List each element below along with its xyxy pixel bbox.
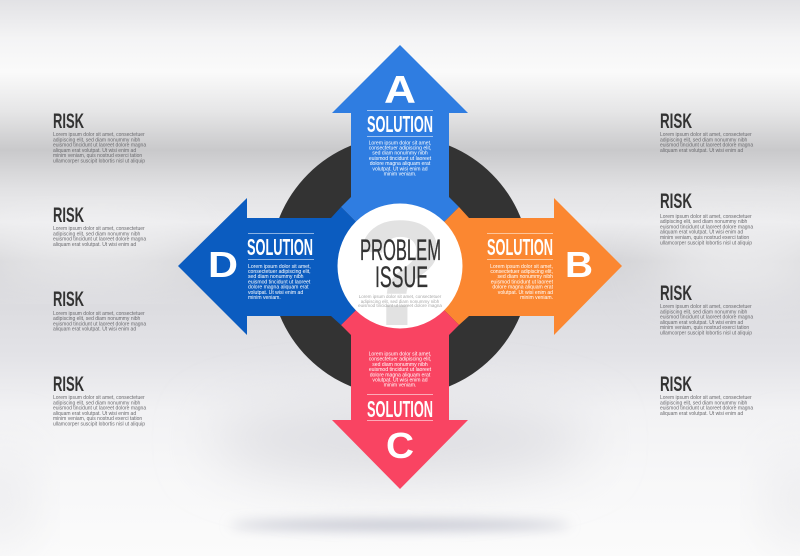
risk left 1: ullamcorper suscipit lobortis nisl ut aliquip: [53, 158, 145, 164]
dark circle: [270, 136, 530, 396]
text block B: euismod tincidunt ut laoreet: [491, 279, 554, 285]
text block A: sed diam nonummy nibh: [372, 151, 428, 157]
risk left 1: minim veniam, quis nostrud exerci tation: [53, 153, 142, 159]
risk right 4: Lorem ipsum dolor sit amet, consectetuer: [660, 395, 752, 401]
solution heading C: [367, 394, 433, 422]
center title: [360, 234, 441, 294]
risk right 3: adipiscing elit, sed diam nonummy nibh: [660, 309, 747, 315]
text block D: Lorem ipsum dolor sit amet,: [248, 264, 311, 270]
risk right 1: RISK: [660, 109, 692, 133]
solution heading B: SOLUTION: [487, 234, 553, 260]
risk left 4: aliquam erat volutpat. Ut wisi enim ad: [53, 411, 136, 417]
risk left 2: adipiscing elit, sed diam nonummy nibh: [53, 231, 140, 237]
text block B: Lorem ipsum dolor sit amet,: [490, 264, 553, 270]
center circle: [338, 189, 462, 357]
risk right 3: euismod tincidunt ut laoreet dolore magna: [660, 315, 753, 321]
risk left 4: adipiscing elit, sed diam nonummy nibh: [53, 400, 140, 406]
arrow D: dark blue: [178, 198, 400, 335]
text block B: volutpat. Ut wisi enim ad: [498, 290, 553, 296]
letter A: A: [384, 69, 416, 112]
text block B: [490, 264, 554, 301]
risk right 2: euismod tincidunt ut laoreet dolore magna: [660, 224, 753, 230]
solution heading D: SOLUTION: [247, 234, 313, 260]
risk right 3: minim veniam, quis nostrud exerci tation: [660, 325, 749, 331]
text block B: minim veniam.: [520, 295, 553, 301]
risk left 3: [53, 287, 146, 333]
text block D: sed diam nonummy nibh: [248, 274, 304, 280]
arrow C: red: [332, 266, 468, 489]
risk right 1: euismod tincidunt ut laoreet dolore magna: [660, 143, 753, 149]
risk right 4: aliquam erat volutpat. Ut wisi enim ad: [660, 411, 743, 417]
risk left 1: adipiscing elit, sed diam nonummy nibh: [53, 137, 140, 143]
text block C: minim veniam.: [384, 383, 416, 389]
text block B: sed diam nonummy nibh: [498, 274, 553, 280]
risk right 2: ullamcorper suscipit lobortis nisl ut aliquip: [660, 240, 752, 246]
risk left 2: aliquam erat volutpat. Ut wisi enim ad: [53, 242, 136, 248]
text block C: [369, 352, 432, 389]
risk right 3: ullamcorper suscipit lobortis nisl ut aliquip: [660, 330, 752, 336]
center title: ISSUE: [375, 261, 428, 294]
text block A: [369, 140, 432, 178]
risk left 2: Lorem ipsum dolor sit amet, consectetuer: [53, 226, 145, 232]
risk left 1: [53, 109, 146, 164]
risk left 4: minim veniam, quis nostrud exerci tation: [53, 416, 142, 422]
risk left 2: euismod tincidunt ut laoreet dolore magna: [53, 237, 146, 243]
risk left 3: euismod tincidunt ut laoreet dolore magna: [53, 321, 146, 327]
text block C: volutpat. Ut wisi enim ad: [372, 378, 428, 384]
arrow A: blue: [332, 45, 468, 266]
text block A: euismod tincidunt ut laoreet: [369, 156, 432, 162]
center caption: [358, 294, 442, 308]
risk right 1: Lorem ipsum dolor sit amet, consectetuer: [660, 132, 752, 138]
text block C: dolore magna aliquam erat: [370, 372, 431, 378]
text block D: consectetuer adipiscing elit,: [248, 269, 311, 275]
risk right 3: aliquam erat volutpat. Ut wisi enim ad: [660, 320, 743, 326]
arrow B: orange: [400, 198, 622, 335]
text block C: sed diam nonummy nibh: [372, 362, 428, 368]
text block A: consectetuer adipiscing elit,: [369, 146, 431, 152]
text block A: dolore magna aliquam erat: [370, 161, 431, 167]
risk right 4: euismod tincidunt ut laoreet dolore magna: [660, 406, 753, 412]
risk left 4: [53, 372, 146, 428]
risk left 4: RISK: [53, 372, 84, 396]
risk left 1: aliquam erat volutpat. Ut wisi enim ad: [53, 148, 136, 154]
risk right 3: [660, 281, 753, 336]
risk right 1: aliquam erat volutpat. Ut wisi enim ad: [660, 148, 743, 154]
risk left 3: Lorem ipsum dolor sit amet, consectetuer: [53, 311, 145, 317]
risk right 1: [660, 109, 753, 154]
risk left 3: aliquam erat volutpat. Ut wisi enim ad: [53, 327, 136, 333]
center title: PROBLEM: [360, 234, 441, 267]
text block D: dolore magna aliquam erat: [248, 285, 309, 291]
risk right 2: aliquam erat volutpat. Ut wisi enim ad: [660, 230, 743, 236]
letter D: D: [208, 244, 238, 285]
risk left 4: ullamcorper suscipit lobortis nisl ut aliquip: [53, 422, 145, 428]
risk left 1: RISK: [53, 109, 84, 133]
risk left 3: adipiscing elit, sed diam nonummy nibh: [53, 316, 140, 322]
text block D: euismod tincidunt ut laoreet: [248, 279, 311, 285]
solution heading A: [367, 110, 433, 137]
center caption: Lorem ipsum dolor sit amet, consectetuer: [359, 294, 442, 299]
risk right 4: [660, 372, 753, 417]
text block D: volutpat. Ut wisi enim ad: [248, 290, 303, 296]
risk right 3: Lorem ipsum dolor sit amet, consectetuer: [660, 304, 752, 310]
risk left 1: euismod tincidunt ut laoreet dolore magna: [53, 143, 146, 149]
text block C: Lorem ipsum dolor sit amet,: [369, 352, 431, 358]
text block D: minim veniam.: [248, 295, 281, 301]
text block D: [248, 264, 311, 301]
text block B: consectetuer adipiscing elit,: [490, 269, 553, 275]
solution heading A: SOLUTION: [367, 111, 433, 137]
risk right 2: adipiscing elit, sed diam nonummy nibh: [660, 219, 747, 225]
solution heading D: [247, 233, 314, 260]
letter C: C: [386, 425, 414, 466]
risk right 2: RISK: [660, 189, 692, 213]
risk right 4: adipiscing elit, sed diam nonummy nibh: [660, 400, 747, 406]
text block A: volutpat. Ut wisi enim ad: [372, 166, 428, 172]
solution heading C: SOLUTION: [367, 396, 433, 422]
text block A: minim veniam.: [384, 172, 416, 178]
risk right 2: [660, 189, 753, 246]
solution heading B: [487, 233, 553, 260]
question mark: ?: [354, 189, 446, 357]
risk left 4: Lorem ipsum dolor sit amet, consectetuer: [53, 395, 145, 401]
center caption: adipiscing elit, sed diam nonummy nibh: [361, 299, 440, 304]
letter B: B: [565, 244, 593, 285]
risk right 2: minim veniam, quis nostrud exerci tation: [660, 235, 749, 241]
ground shadow: [230, 520, 570, 530]
risk left 2: RISK: [53, 203, 84, 227]
text block C: consectetuer adipiscing elit,: [369, 357, 431, 363]
risk right 3: RISK: [660, 281, 692, 305]
text block B: dolore magna aliquam erat: [492, 285, 554, 291]
text block A: Lorem ipsum dolor sit amet,: [369, 140, 431, 146]
risk left 4: euismod tincidunt ut laoreet dolore magna: [53, 406, 146, 412]
risk left 1: Lorem ipsum dolor sit amet, consectetuer: [53, 132, 145, 138]
risk right 1: adipiscing elit, sed diam nonummy nibh: [660, 137, 747, 143]
text block C: euismod tincidunt ut laoreet: [369, 367, 432, 373]
risk left 3: RISK: [53, 287, 84, 311]
risk left 2: [53, 203, 146, 248]
center caption: euismod tincidunt ut laoreet dolore magna: [358, 303, 442, 308]
risk right 2: Lorem ipsum dolor sit amet, consectetuer: [660, 214, 752, 220]
risk right 4: RISK: [660, 372, 692, 396]
